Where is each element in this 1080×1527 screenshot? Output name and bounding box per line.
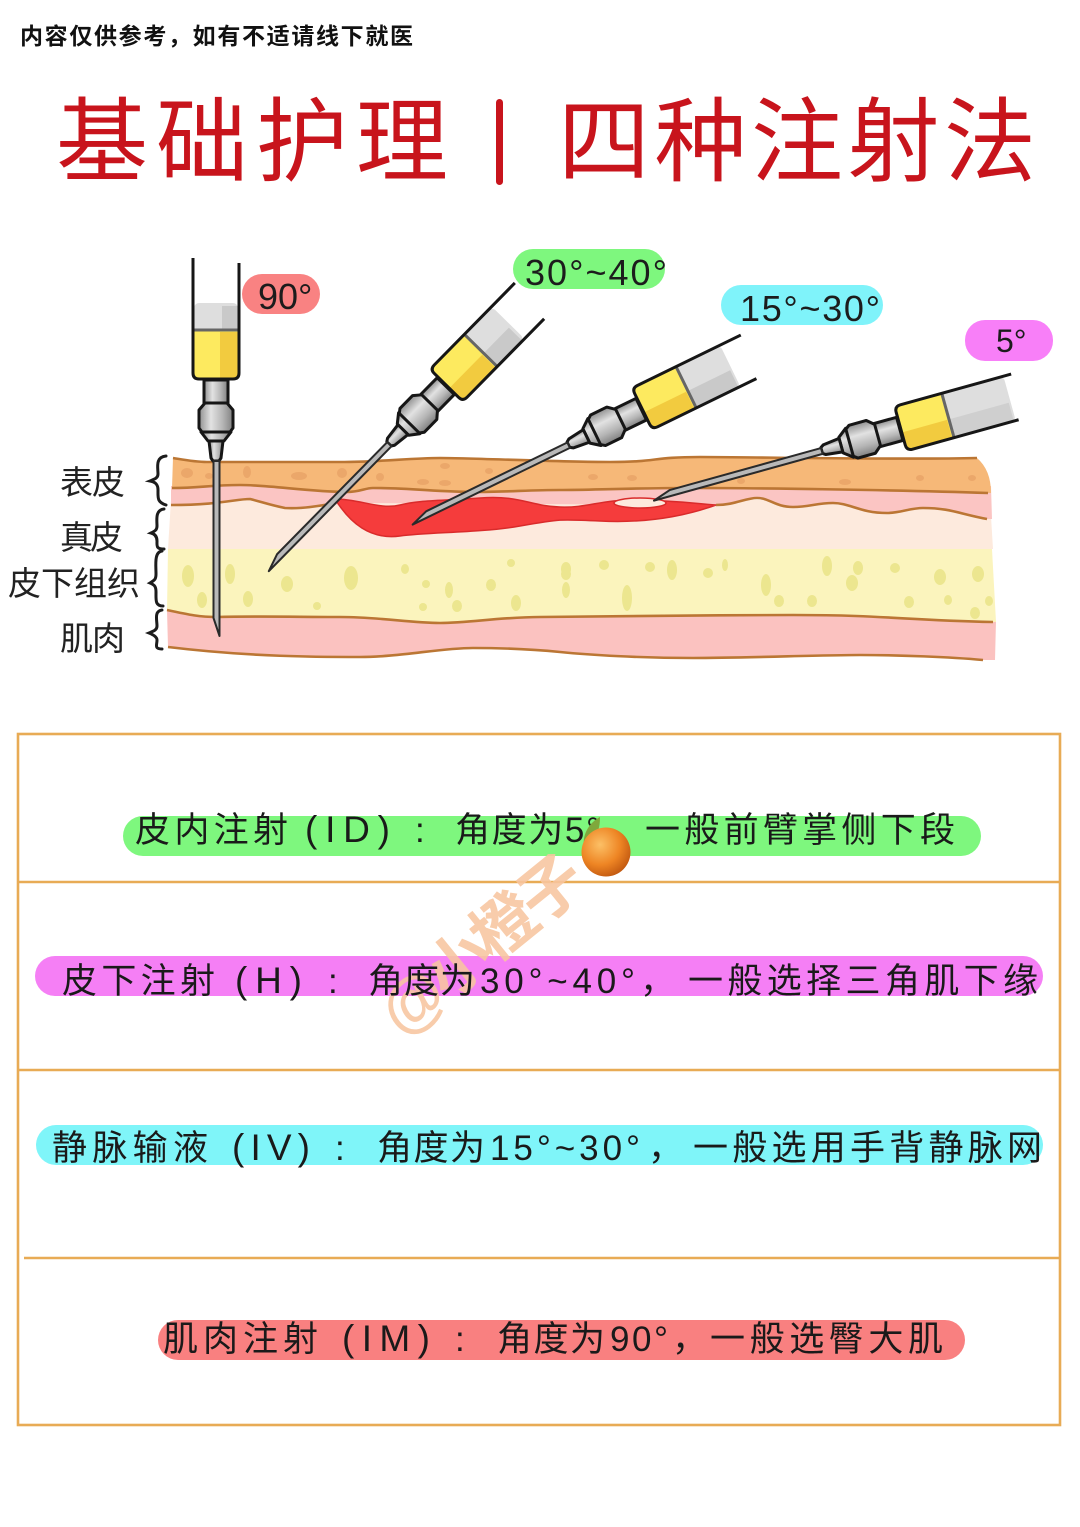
blood pool: [335, 497, 716, 537]
row: intravenous infusion: 角度为: [377, 1129, 485, 1168]
row: subcutaneous injection: :: [328, 962, 338, 1001]
skin diagram: [167, 457, 996, 660]
row: intradermal injection: 一般前臂掌侧下段: [645, 811, 955, 850]
layer labels: [8, 464, 140, 657]
epidermis dots: [181, 463, 976, 486]
row: intravenous infusion: (IV): [232, 1127, 310, 1168]
angle label: 5: [965, 320, 1053, 361]
row: intradermal injection: :: [415, 811, 425, 850]
row: intramuscular injection: 90°: [610, 1320, 668, 1359]
row: intramuscular injection: 肌肉注射: [163, 1320, 318, 1359]
row: intravenous infusion: 15°~30°: [490, 1129, 640, 1168]
layer: muscle: [167, 610, 996, 660]
skin outlines: [167, 457, 993, 660]
label: epidermis: 表皮: [60, 464, 125, 501]
row: intramuscular injection: 角度为: [497, 1320, 605, 1359]
braces: [149, 456, 166, 649]
icon: orange: [582, 817, 630, 876]
row: intramuscular injection: ，: [672, 1320, 707, 1359]
syringe: 90 degrees: [193, 258, 239, 636]
row: intradermal injection: 皮内注射: [135, 811, 288, 850]
row: intramuscular injection: :: [455, 1320, 465, 1359]
layer: epidermis: [172, 457, 991, 493]
row: subcutaneous injection: 30°~40°: [480, 962, 635, 1001]
table frame: [18, 734, 1060, 1425]
row: subcutaneous injection: 一般选择三角肌下缘: [688, 962, 1038, 1001]
syringe: 15-30 degrees: [401, 335, 761, 542]
angle label: 90: [242, 274, 320, 317]
row: subcutaneous injection: 皮下注射: [62, 962, 215, 1001]
row: subcutaneous injection: 角度为: [368, 962, 475, 1001]
disclaimer note: 内容仅供参考，如有不适请线下就医: [20, 23, 413, 49]
watermark: @小橙子: [365, 841, 599, 1049]
row: intradermal injection: 角度为5°: [455, 811, 600, 850]
layer: dermis: [168, 500, 993, 549]
label: muscle: 肌肉: [60, 620, 125, 657]
fat dots: [182, 556, 993, 619]
syringe: 30-40 degrees: [250, 283, 548, 585]
angle label: 30-40: 30°~40°: [525, 252, 667, 293]
row: intravenous infusion: 一般选用手背静脉网: [693, 1129, 1042, 1168]
label: dermis: 真皮: [60, 519, 123, 556]
highlight: intramuscular: [158, 1320, 965, 1360]
angle label: 15-30: 15°~30°: [740, 288, 880, 329]
layer: upper dermis pink: [171, 486, 992, 519]
row: intramuscular injection: (IM): [342, 1318, 430, 1359]
row: intramuscular injection: 一般选臀大肌: [710, 1320, 943, 1359]
row: subcutaneous injection: [62, 960, 1038, 1001]
syringe: 5 degrees: [647, 374, 1023, 519]
title: 四种注射法: [558, 92, 1036, 194]
layer: subcutaneous fat: [167, 549, 996, 623]
row: intravenous infusion: [52, 1127, 1042, 1168]
blister: [614, 498, 666, 508]
highlight: intradermal: [123, 816, 981, 856]
title: [56, 92, 1036, 194]
row: intradermal injection: [135, 809, 955, 850]
title: 基础护理: [56, 92, 448, 194]
row: subcutaneous injection: (H): [235, 960, 302, 1001]
row: subcutaneous injection: ，: [640, 962, 675, 1001]
angle label: 90: 90°: [258, 276, 312, 317]
row: intramuscular injection: [163, 1318, 943, 1359]
row: intravenous infusion: ，: [648, 1129, 683, 1168]
row: intravenous infusion: 静脉输液: [52, 1129, 208, 1168]
highlight: subcutaneous: [35, 956, 1043, 996]
highlight: intravenous: [36, 1125, 1043, 1165]
label: subcutaneous tissue: 皮下组织: [8, 565, 140, 602]
row: intradermal injection: (ID): [305, 809, 390, 850]
row: intravenous infusion: :: [335, 1129, 345, 1168]
angle label: 5: 5°: [996, 323, 1027, 359]
